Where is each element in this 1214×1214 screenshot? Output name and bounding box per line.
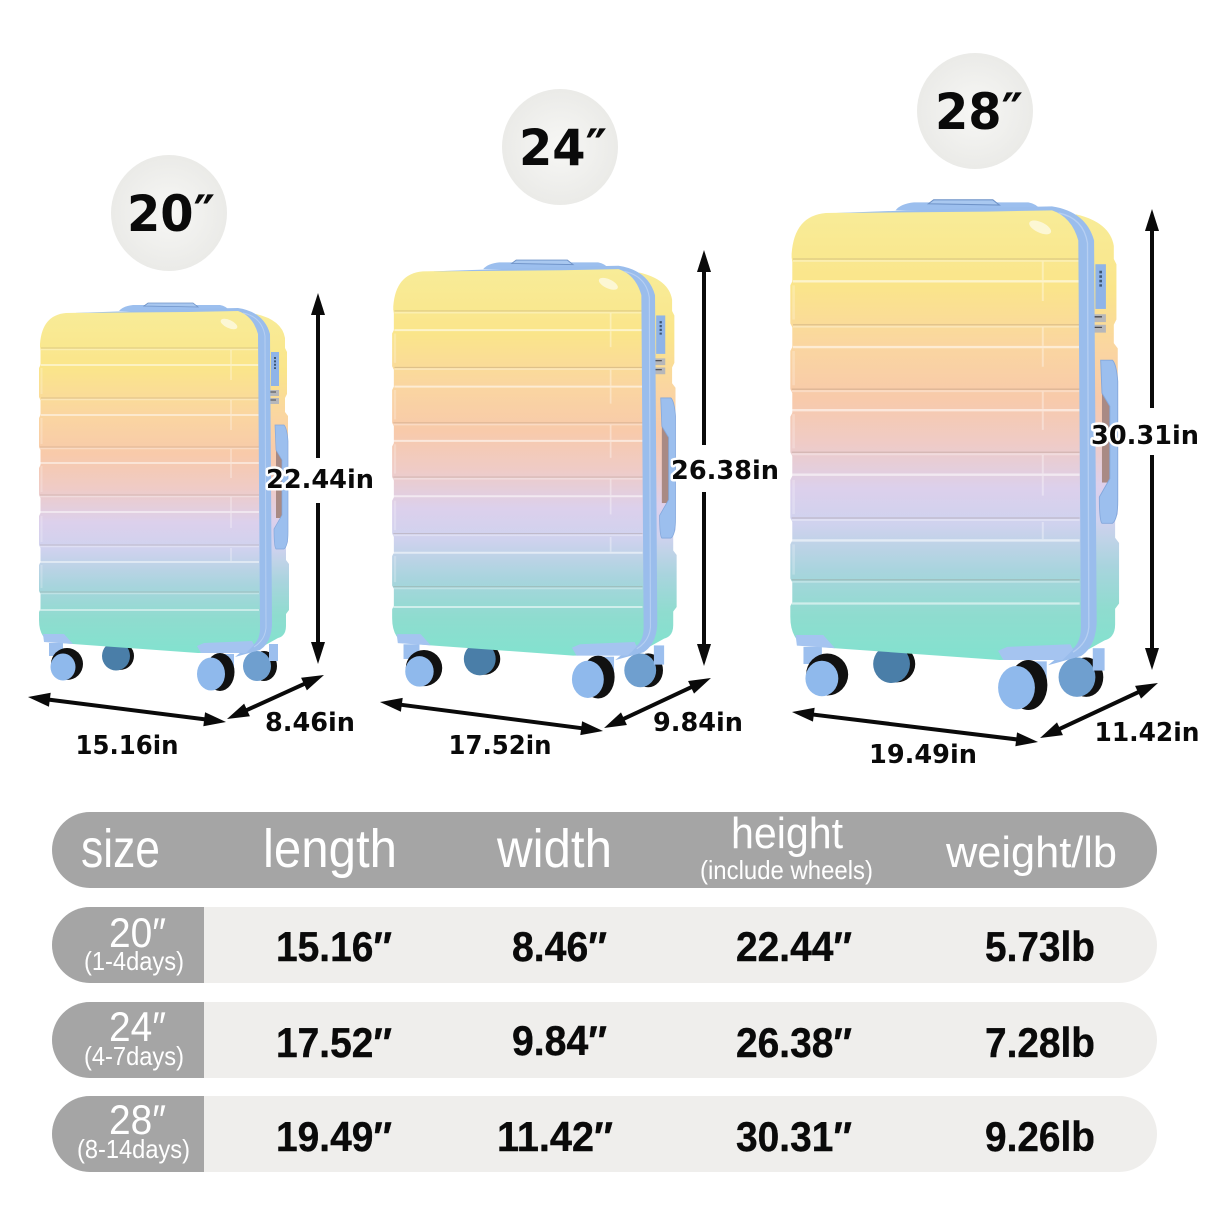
table header row: height [731,809,843,858]
table row: 28 inch [52,1096,1157,1172]
size badge: 24 inch: 24″ [519,119,607,177]
table row: 20 inch [52,907,1157,983]
dimension labels: 28 inch [869,421,1200,770]
table row: 24 inch: (4-7days) [84,1041,184,1071]
suitcase: 20 inch [39,303,289,691]
table row: 20 inch: (1-4days) [84,946,184,976]
table row: 24 inch: 17.52″ [276,1019,392,1066]
size badge: 24 inch [502,89,618,205]
dimension labels: 24 inch [448,456,779,761]
table row: 24 inch: 9.84″ [512,1017,607,1064]
size badge: 20 inch: 20″ [127,185,215,243]
table header row: width [496,819,612,879]
dimension labels: 20 inch: 8.46in [265,708,355,738]
suitcase: 24 inch [392,260,677,699]
dimension labels: 24 inch: 17.52in [448,731,552,761]
table row: 20 inch: 5.73lb [985,923,1095,970]
table row: 20 inch: 15.16″ [276,923,392,970]
dimension labels: 20 inch: 15.16in [76,731,178,761]
dimension labels: 28 inch: 30.31in [1091,421,1199,451]
table header row: weight/lb [945,828,1117,877]
table row: 24 inch: 26.38″ [736,1019,852,1066]
dimension arrows: 28 inch [802,219,1152,741]
dimension labels: 20 inch [76,465,374,761]
dimension labels: 24 inch: 26.38in [671,456,779,486]
dimension arrows: 24 inch [390,260,704,730]
dimension labels: 24 inch: 9.84in [653,708,743,738]
size badge: 20 inch [111,155,227,271]
dimension labels: 28 inch: 11.42in [1094,718,1200,748]
table header row [52,809,1157,888]
size badge: 28 inch: 28″ [935,83,1023,141]
table row: 24 inch [52,1002,1157,1078]
size badge: 28 inch [917,53,1033,169]
table row: 28 inch: (8-14days) [77,1134,190,1164]
table row: 28 inch: 28″ [109,1096,166,1143]
table row: 20 inch: 20″ [109,909,166,956]
dimension arrows: 20 inch [38,303,318,721]
dimension labels: 28 inch: 19.49in [869,740,977,770]
suitcase: 28 inch [790,200,1119,710]
table row: 20 inch: 8.46″ [512,923,607,970]
table row: 28 inch: 19.49″ [276,1113,392,1160]
table header row: (include wheels) [700,855,873,885]
table row: 24 inch: 24″ [109,1003,166,1050]
table row: 28 inch: 9.26lb [985,1113,1095,1160]
table row: 24 inch: 7.28lb [985,1019,1095,1066]
table row: 28 inch: 30.31″ [736,1113,852,1160]
table header row: length [263,819,397,879]
table header row: size [81,819,160,879]
table row: 20 inch: 22.44″ [736,923,852,970]
dimension labels: 20 inch: 22.44in [266,465,374,495]
table row: 28 inch: 11.42″ [497,1113,613,1160]
